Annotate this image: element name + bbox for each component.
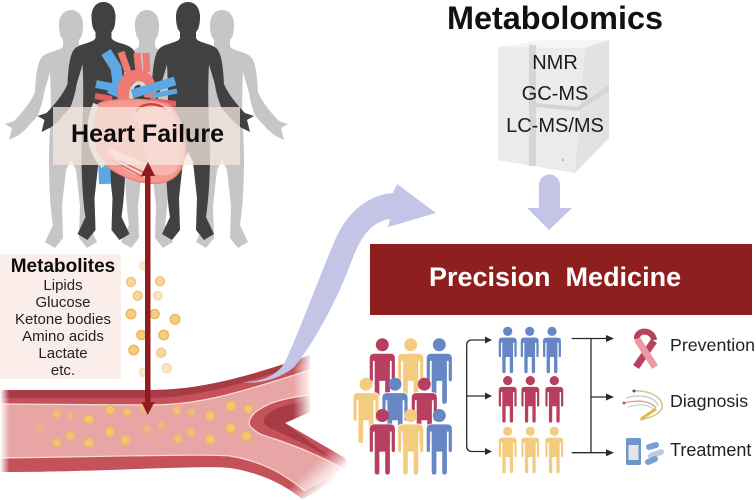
arrow: metabolomics to precision medicine [527,174,572,230]
icon: awareness ribbon [636,332,655,367]
metabolites heading: Metabolites [11,256,115,277]
arrow: curved lilac from vessel to precision medicine [243,184,436,383]
icon: anatomical heart [89,52,185,184]
icon: medication bottle and pills [626,438,661,465]
metabolites items: Amino acids [22,328,104,345]
metabolite particles leaving vessel [126,262,180,376]
translucent title band [53,107,240,165]
panel: precision medicine banner [370,244,752,315]
metabolites items: Glucose [35,294,91,311]
label: Diagnosis: Diagnosis [670,391,748,411]
stratified group: blue [498,327,561,374]
blood vessel [0,355,350,499]
grey background human silhouettes [5,10,288,248]
mixed patient population [353,338,452,475]
arrows: stratification bracket [467,336,492,455]
metabolites items: Ketone bodies [15,311,111,328]
instrument techniques: GC-MS [522,83,588,105]
heading: Metabolomics: Metabolomics [447,0,663,36]
metabolites items: Lipids [43,277,83,294]
banner title: Precision Medicine [429,262,681,292]
stratified group: yellow [498,427,564,474]
metabolites items: etc. [51,362,75,379]
stratified group: red [498,376,564,423]
icon: catheter [622,390,662,420]
dark foreground human silhouettes [38,2,254,240]
label: Treatment: Treatment [670,440,751,460]
icon: analytical instrument [498,40,609,173]
arrow: double-headed vessel to heart [141,162,155,415]
label: Prevention: Prevention [670,335,755,355]
metabolite particles in vessel [36,401,252,447]
arrows: to outcomes [572,335,614,456]
panel: metabolites list [0,254,121,379]
instrument techniques: LC-MS/MS [506,115,604,137]
instrument techniques [506,52,604,137]
heading: Heart Failure: Heart Failure [71,120,224,148]
instrument techniques: NMR [532,52,578,74]
metabolites items: Lactate [38,345,88,362]
metabolites items [15,277,111,379]
